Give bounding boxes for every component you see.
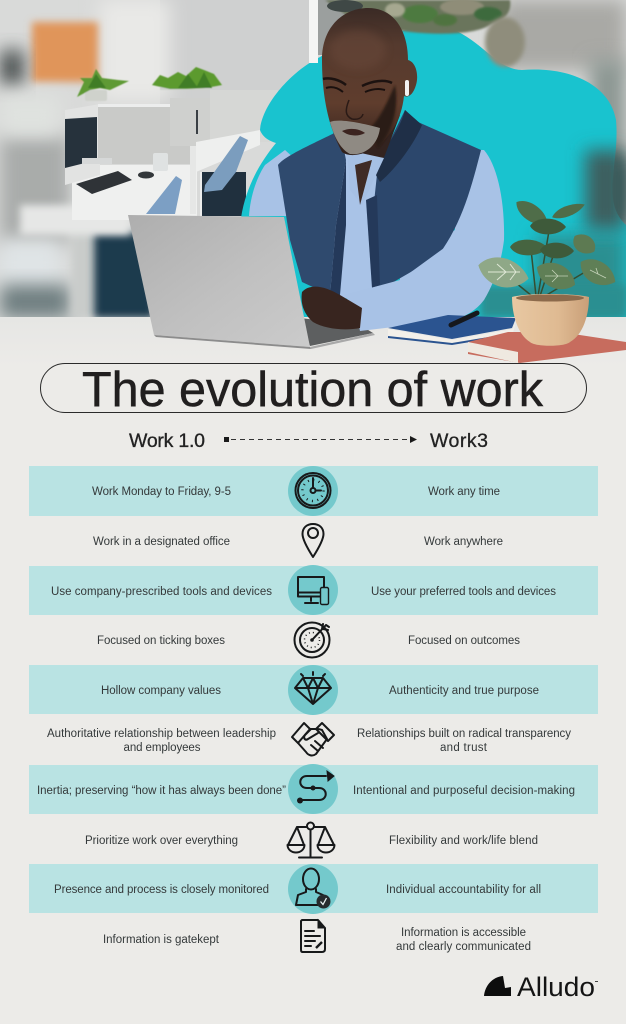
row 1: hours (29, 466, 598, 516)
office cubicles (72, 165, 197, 220)
white pillar (309, 0, 318, 63)
row 3: tools: Use company-prescribed tools and devices (51, 586, 272, 598)
row 9: accountability (29, 864, 598, 914)
row 7: decision-making: Inertia; preserving “how it has always been done” (37, 785, 286, 797)
teal blob (240, 25, 626, 318)
row 9: accountability: Presence and process is closely monitored (54, 884, 269, 896)
hand (302, 287, 362, 329)
laptop (128, 215, 375, 349)
title pill (40, 363, 586, 417)
row 2: location: Work anywhere (424, 536, 503, 548)
row 8: balance: Flexibility and work/life blend (389, 835, 538, 847)
row 10: information: Information is accessible (401, 927, 526, 939)
row 4: outcomes: Focused on ticking boxes (97, 635, 225, 647)
neck (362, 115, 400, 158)
left sleeve (249, 150, 291, 216)
row 3: tools (29, 565, 598, 615)
row 2: location (93, 524, 503, 557)
row 8: balance (85, 822, 538, 858)
label: Work3: Work3 (430, 430, 488, 452)
row 7: decision-making (29, 764, 598, 814)
row 5: values: Authenticity and true purpose (389, 685, 539, 697)
row 1: hours: Work any time (428, 486, 500, 498)
foliage wall (325, 0, 525, 67)
icon: scales (288, 822, 334, 858)
vest (278, 130, 346, 295)
icon: document (301, 920, 325, 952)
row 8: balance: Prioritize work over everything (85, 835, 238, 847)
icon: clock (288, 466, 338, 516)
row 6: relationships: Authoritative relationship between leadership (47, 728, 276, 740)
row 10: information (103, 920, 531, 953)
earbud (405, 80, 409, 96)
logo wordmark: Alludo (517, 972, 595, 1002)
row 4: outcomes (97, 622, 520, 658)
row 6: relationships (47, 723, 571, 755)
leaves (474, 195, 621, 296)
timeline header (129, 430, 488, 452)
icon: monitor and phone (288, 565, 338, 615)
red book (468, 332, 626, 363)
office plants (77, 67, 222, 101)
pot (512, 294, 589, 346)
icon: winding path (288, 764, 338, 814)
photo background: blurred office (0, 0, 626, 318)
logo mark (484, 976, 511, 996)
row 3: tools: Use your preferred tools and devices (371, 586, 556, 598)
row 2: location: Work in a designated office (93, 536, 230, 548)
row 4: outcomes: Focused on outcomes (408, 635, 520, 647)
dashed arrow (224, 436, 417, 443)
row 10: information: and clearly communicated (396, 941, 531, 953)
forearm and cuff (344, 240, 490, 331)
label: Work 1.0: Work 1.0 (129, 430, 205, 452)
row 7: decision-making: Intentional and purposeful decision-making (353, 785, 575, 797)
icon: handshake (292, 723, 334, 755)
title text: The evolution of work (82, 363, 543, 417)
right upper sleeve (400, 150, 504, 300)
shirt front (330, 154, 377, 298)
blue notebook with pen (388, 313, 516, 345)
icon: diamond (288, 665, 338, 715)
potted plant (474, 195, 621, 346)
row 5: values: Hollow company values (101, 685, 221, 697)
row 1: hours: Work Monday to Friday, 9-5 (92, 486, 231, 498)
row 6: relationships: and trust (440, 742, 488, 754)
Alludo logo (484, 972, 598, 1002)
icon: person with check (288, 864, 338, 914)
row 5: values (29, 665, 598, 715)
head (322, 8, 417, 155)
icon: target (294, 622, 330, 658)
row 10: information: Information is gatekept (103, 934, 220, 946)
icon: map pin (302, 524, 324, 557)
row 9: accountability: Individual accountability for all (386, 884, 541, 896)
row 6: relationships: Relationships built on radical transparency (357, 728, 571, 740)
blurred right side background (500, 0, 626, 70)
desk (0, 317, 626, 367)
row 6: relationships: and employees (124, 742, 201, 754)
